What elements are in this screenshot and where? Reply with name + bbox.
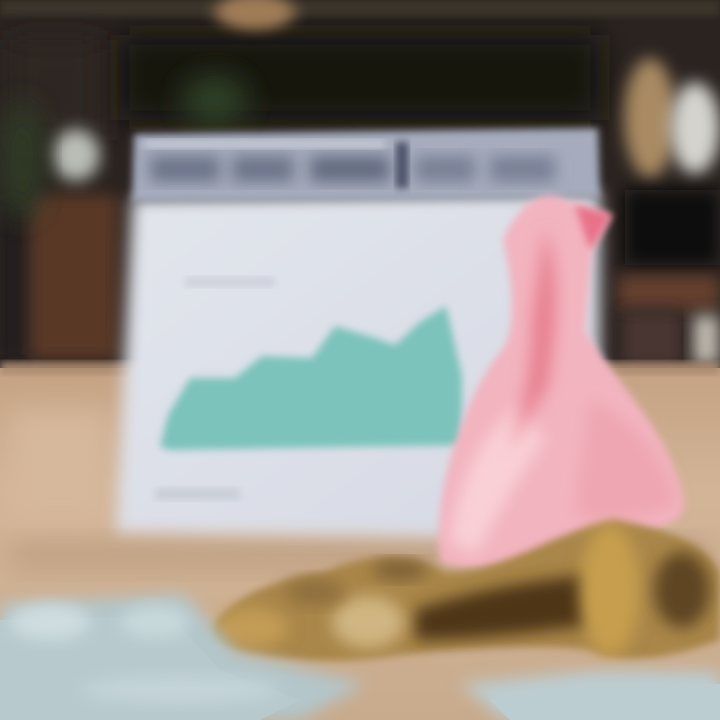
chart card <box>116 128 600 538</box>
wooden table <box>0 362 720 720</box>
banknotes front right <box>460 670 720 720</box>
background: dark room <box>0 0 720 380</box>
gold coins pile <box>208 520 720 661</box>
card header <box>132 128 600 202</box>
teal area chart <box>160 306 462 450</box>
pink piggy bank <box>438 196 684 568</box>
banknotes front left <box>0 594 365 720</box>
background: shelf objects <box>0 0 720 367</box>
card faint text lines <box>155 277 275 500</box>
card body <box>116 192 600 538</box>
